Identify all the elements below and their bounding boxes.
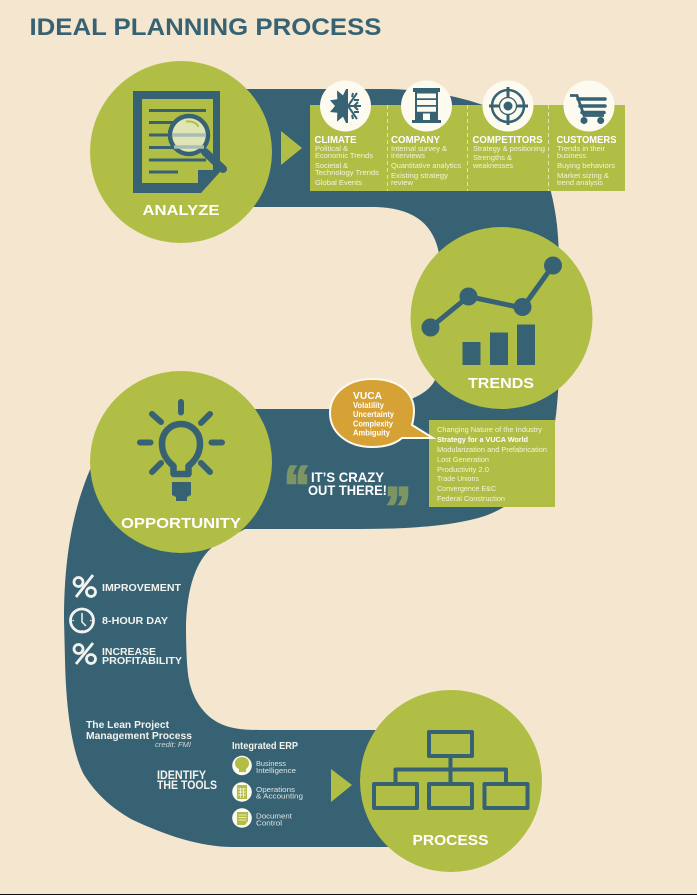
text: customers: business xyxy=(557,151,586,160)
text: identify the tools xyxy=(157,770,217,792)
text: climate xyxy=(314,135,379,187)
text: company: Internal survey & xyxy=(391,144,447,153)
callout: VUCA speech bubble xyxy=(330,379,433,447)
label: trends: TRENDS xyxy=(468,375,534,392)
icon: competitors xyxy=(482,80,534,132)
text: competitors: Strengths & xyxy=(473,153,512,162)
quote: it's crazy out there: ” xyxy=(385,476,411,541)
text: customers: Trends in their xyxy=(557,144,606,153)
text: company: Existing strategy xyxy=(391,171,448,180)
callout: VUCA speech bubble: Complexity xyxy=(353,420,394,428)
panel: trends circle xyxy=(410,227,592,409)
text: climate: Global Events xyxy=(315,178,362,187)
quote: it's crazy out there: “ xyxy=(284,455,310,520)
panel: analyze factors xyxy=(310,80,625,191)
text: competitors: weaknesses xyxy=(472,161,513,170)
icon: org chart xyxy=(374,732,528,808)
text: identify the tools: THE TOOLS xyxy=(157,780,217,792)
text: lean project management: Management Process xyxy=(86,730,192,742)
quote: it's crazy out there xyxy=(284,455,411,541)
text: customers: trend analysis xyxy=(557,178,603,187)
text: lean project management: credit: FMI xyxy=(155,740,191,749)
list: integrated ERP: Operations xyxy=(256,785,295,794)
list: benefits: PROFITABILITY xyxy=(102,655,182,667)
quote: it's crazy out there: IT’S CRAZY xyxy=(311,469,385,485)
icon: line and bar chart xyxy=(422,256,562,365)
panel: trend topics: Changing Nature of the Industry xyxy=(437,425,542,434)
text: climate: Political & xyxy=(315,144,348,153)
icon: percent xyxy=(74,575,96,597)
panel: trend topics: Productivity 2.0 xyxy=(437,465,489,474)
label: process: PROCESS xyxy=(412,832,488,849)
icon: clock xyxy=(70,609,94,632)
callout: VUCA speech bubble: VUCA xyxy=(353,391,382,402)
teal S-shaped road xyxy=(64,89,561,847)
list: integrated ERP: Intelligence xyxy=(256,766,296,775)
panel: trend topics: Convergence E&C xyxy=(437,484,496,493)
callout: VUCA speech bubble: Ambiguity xyxy=(353,428,391,438)
panel: trend topics: Lost Generation xyxy=(437,455,489,464)
arrow: analyze to factors xyxy=(281,131,302,165)
list: integrated ERP: Control xyxy=(256,818,282,828)
icon: operations and accounting xyxy=(232,782,252,802)
text: customers: CUSTOMERS xyxy=(556,135,617,146)
callout: VUCA speech bubble: Uncertainty xyxy=(353,410,395,419)
panel: trend topics: Strategy for a VUCA World xyxy=(437,435,528,444)
text: climate: Technology Trends xyxy=(315,168,379,177)
text: customers: Market sizing & xyxy=(557,171,609,180)
panel: trend topics: Federal Construction xyxy=(437,494,505,503)
icon: customers xyxy=(564,80,614,132)
text: competitors: Strategy & positioning xyxy=(473,144,545,153)
icon: percent xyxy=(74,643,96,664)
list: benefits: 8-HOUR DAY xyxy=(102,615,168,627)
text: company: Quantitative analytics xyxy=(391,161,461,170)
list: integrated ERP: & Accounting xyxy=(256,792,303,800)
list: integrated ERP xyxy=(232,741,303,828)
text: lean project management: The Lean Project xyxy=(86,719,169,731)
text: climate: Societal & xyxy=(315,161,348,170)
icon: light bulb xyxy=(140,402,222,501)
text: company: review xyxy=(391,178,414,187)
panel: analyze circle xyxy=(90,61,272,243)
panel: trend topics: Trade Unions xyxy=(437,474,479,483)
list: integrated ERP: Business xyxy=(256,759,286,768)
panel: process circle xyxy=(360,690,542,872)
panel: opportunity circle xyxy=(90,371,272,553)
label: opportunity: OPPORTUNITY xyxy=(121,515,241,532)
text: customers xyxy=(556,135,617,187)
text: company: COMPANY xyxy=(391,135,440,146)
arrow: tools to process xyxy=(331,769,352,802)
list: benefits xyxy=(70,575,182,667)
text: lean project management xyxy=(86,719,192,749)
icon: document control xyxy=(232,808,252,828)
quote: it's crazy out there: OUT THERE! xyxy=(308,482,387,498)
list: integrated ERP: Document xyxy=(256,812,292,820)
text: company: interviews xyxy=(391,151,425,160)
icon: company xyxy=(401,80,452,132)
text: identify the tools: IDENTIFY xyxy=(157,770,206,782)
text: climate: CLIMATE xyxy=(314,135,357,146)
label: analyze: ANALYZE xyxy=(142,202,220,219)
list: benefits: IMPROVEMENT xyxy=(102,582,182,594)
text: company xyxy=(391,135,461,187)
panel: trend topics: Modularization and Prefabrication xyxy=(437,445,547,454)
text: customers: Buying behaviors xyxy=(557,161,615,170)
text: competitors xyxy=(472,135,545,170)
list: benefits: INCREASE xyxy=(102,646,156,658)
icon: business intelligence xyxy=(232,756,252,775)
text: climate: Economic Trends xyxy=(315,151,373,160)
icon: climate xyxy=(320,80,371,132)
list: integrated ERP: Integrated ERP xyxy=(232,741,298,752)
title: IDEAL PLANNING PROCESS xyxy=(30,14,382,41)
icon: document with magnifier xyxy=(133,91,223,193)
callout: VUCA speech bubble: Volatility xyxy=(353,401,385,410)
text: competitors: COMPETITORS xyxy=(472,135,543,146)
panel: trend topics xyxy=(429,420,555,507)
